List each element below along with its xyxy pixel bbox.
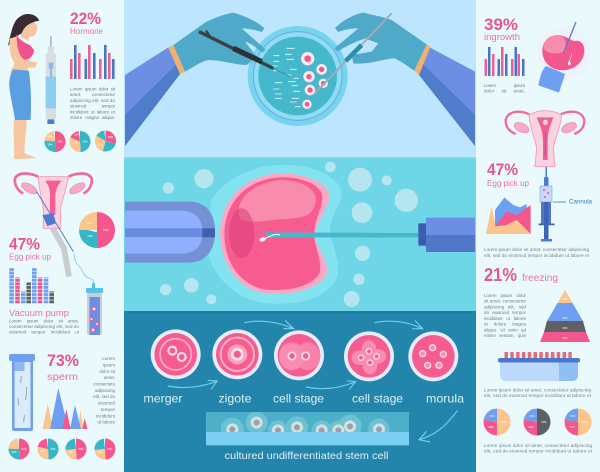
pie chart: egg pick up [87, 221, 109, 239]
stat: 47% egg pick up [487, 160, 530, 188]
stage labels: morula [426, 392, 464, 406]
panel: cell development stages [124, 313, 476, 472]
stage labels: cell stage [352, 392, 403, 406]
pie chart: egg pick up: 50% [103, 228, 109, 232]
text block: vacuum pump: eiusmod tempor incididunt ut [9, 330, 80, 334]
panel: right freezing section [484, 265, 593, 454]
text block: freezing: adipiscing elit, sed [484, 304, 526, 309]
text block: sperm: ut labore [97, 420, 115, 425]
stat: 21% freezing: 21% [484, 265, 517, 285]
pyramid chart [540, 290, 590, 342]
text block: sperm: incididunt [96, 413, 116, 418]
text block: sperm: Lorem [102, 356, 115, 361]
pie chart row: hormone: 30% [47, 142, 53, 146]
text block: sperm: elit, sed do [93, 394, 115, 399]
pie chart row: sperm: 50% [107, 447, 113, 451]
icon: syringe with cannula: Cannula [569, 198, 592, 206]
pie chart row: hormone: 20% [47, 134, 53, 138]
culture caption: cultured undifferentiated stem cell [224, 450, 388, 462]
bar chart: block columns [9, 268, 54, 304]
pyramid chart: 50% [562, 316, 568, 320]
stat: 22% hormone [70, 9, 104, 36]
text block: hormone: adipiscing elit, sed do [70, 98, 115, 103]
text block: freezing: et dolore magna [484, 322, 526, 327]
panel: left sperm section [9, 351, 116, 454]
left holding pipette [125, 202, 215, 263]
left gloved hand with syringe [125, 13, 290, 146]
text block: pies: Lorem ipsum dolor sit amet, consectetur adipiscing [484, 443, 592, 448]
text block: ingrowth: dolor sit amet, [484, 89, 525, 94]
pie chart row: hormone: 50% [57, 140, 63, 144]
panel: left hormone section [8, 9, 116, 159]
pie chart row: hormone: 20% [74, 132, 80, 136]
text block: freezing: minim veniam, quis [484, 333, 527, 338]
text block: sperm: amet, [104, 375, 115, 380]
text block: egg pick up: elit, sed do eiusmod tempor incididunt ut labore et [484, 253, 590, 258]
stat: 21% freezing [484, 265, 558, 285]
pie chart row: sperm: 50% [78, 447, 84, 451]
stat: 21% freezing: freezing [522, 273, 558, 284]
panel: sperm injection into egg [124, 159, 476, 313]
pie chart row: sperm: 50% [50, 447, 56, 451]
icon: egg with sperm and cup [538, 22, 591, 93]
injection needle and sperm [259, 232, 418, 242]
pie chart row: hormone: 50% [82, 140, 88, 144]
stat: 73% sperm [47, 351, 79, 383]
text block: hormone: dolore magna aliqua. [70, 115, 115, 120]
text block: freezing: sit amet, consectetur [484, 299, 526, 304]
culture dish with stem cells [206, 412, 409, 445]
arrows between stages [168, 320, 458, 442]
text block: freezing [484, 293, 527, 338]
icon: sperm tube [9, 354, 35, 431]
text block: hormone: incididunt ut labore et [70, 109, 116, 114]
stat: 47% egg pick up: Egg pick up [9, 252, 52, 262]
text block: freezing: aliqua. Ut enim ad [484, 327, 526, 332]
stat: 22% hormone: 22% [70, 9, 101, 28]
icon: freezing tray [498, 352, 580, 381]
text block: vacuum pump: consectetur adipiscing elit, sed do [9, 324, 79, 329]
pie chart row: freezing: 30% [528, 425, 534, 429]
stat: 39% ingrowth [484, 15, 520, 42]
stage: four-cell [344, 331, 394, 381]
icon: woman injecting [8, 14, 39, 159]
text block: sperm: eiusmod [98, 401, 115, 406]
stage labels: zigote [218, 392, 252, 406]
pie chart row: freezing: 50% [501, 420, 507, 424]
text block: vacuum pump: Lorem ipsum dolor sit amet, [9, 318, 79, 324]
text block: sperm: tempor [101, 407, 115, 412]
text block: hormone: amet, consectetur [70, 92, 116, 97]
stat: 39% ingrowth: 39% [484, 15, 518, 34]
right injector [418, 218, 475, 252]
pie chart: egg pick up: 25% [87, 234, 93, 238]
text block: sperm [93, 356, 116, 425]
peak chart [42, 388, 88, 429]
stat: 39% ingrowth: ingrowth [484, 32, 520, 42]
text block: egg pick up [484, 247, 590, 258]
text block: hormone [70, 86, 116, 120]
bar chart: ingrowth [484, 47, 524, 76]
pyramid chart: 50% [562, 336, 568, 340]
panel: left egg pick up section [9, 173, 109, 335]
icon: uterus with aspiration tool [15, 173, 94, 283]
pie chart row: hormone: 30% [98, 143, 104, 147]
text block: freezing: do eiusmod tempor [484, 310, 526, 315]
stat: 47% egg pick up: 47% [9, 234, 40, 254]
pie chart row: sperm [11, 444, 113, 454]
pie chart row: hormone [47, 132, 114, 147]
pie chart row: sperm: 30% [11, 450, 17, 454]
text block: sperm: ipsum [103, 362, 115, 367]
pyramid chart: 30% [562, 326, 568, 330]
text block: tray [484, 388, 592, 398]
pyramid chart: 10% [562, 297, 568, 301]
bar chart: hormone [70, 45, 115, 79]
icon: injection pen [46, 36, 56, 124]
text block: egg pick up: Lorem ipsum dolor sit amet, consectetur adipiscing [484, 247, 589, 252]
text block: hormone: eiusmod tempor [70, 104, 116, 109]
panel: hands and petri dish [124, 0, 476, 159]
text block: tray: elit, sed do eiusmod tempor incididunt ut labore et [484, 393, 592, 398]
text block: vacuum pump [9, 318, 80, 334]
text block: freezing: incididunt ut labore [484, 316, 526, 321]
pie chart row: freezing: 30% [488, 425, 494, 429]
panel: right ingrowth section [484, 15, 591, 167]
pie chart row: freezing [488, 414, 588, 429]
stage: morula [408, 331, 458, 381]
pie chart row: hormone: 30% [108, 135, 114, 139]
stage: two-cell [274, 330, 324, 380]
area chart [486, 197, 531, 234]
pie chart row: sperm: 25% [68, 450, 74, 454]
text block: ingrowth [484, 83, 525, 94]
stat: 47% egg pick up: Egg pick up [487, 179, 530, 188]
text block: sperm: adipiscing [95, 388, 115, 393]
egg cell [208, 165, 342, 304]
stage: zigote [212, 329, 262, 379]
panel: right egg pick up section [484, 160, 592, 258]
pie chart row: freezing: 50% [582, 420, 588, 424]
text block: sperm: dolor sit [99, 369, 116, 374]
stat: 73% sperm: sperm [47, 371, 78, 383]
pie chart row: freezing: 20% [570, 414, 576, 418]
pie chart row: freezing: 30% [569, 425, 575, 429]
text block: freezing: Lorem ipsum dolor [484, 293, 526, 298]
text block: ingrowth: Lorem ipsum [484, 83, 525, 88]
stage: merger [151, 329, 201, 379]
bubbles [160, 162, 418, 307]
icon: uterus [506, 111, 584, 167]
petri dish [248, 26, 348, 126]
stat: 47% egg pick up [9, 234, 52, 262]
stage labels: merger [144, 392, 182, 406]
pie chart: egg pick up: 25% [87, 221, 93, 225]
right gloved hand with tool [315, 13, 475, 146]
text block: sperm: consectetu [93, 382, 115, 386]
stat: 22% hormone: Hormone [70, 27, 104, 36]
pie chart row: sperm: 25% [97, 450, 103, 454]
text block: pies: elit, sed do eiusmod tempor incididunt ut labore et [484, 448, 593, 454]
pie chart row: sperm: 50% [21, 447, 27, 451]
pie chart row: freezing: 20% [529, 414, 535, 418]
pie chart row: freezing: 50% [541, 420, 547, 424]
stage labels: cell stage [273, 392, 324, 406]
stat: 73% sperm: 73% [47, 351, 79, 370]
text block: hormone: Lorem ipsum dolor sit [70, 86, 116, 92]
pie chart row: freezing: 20% [489, 414, 495, 418]
text block: pies [484, 443, 593, 454]
stage labels [144, 392, 464, 406]
pie chart row: sperm: 30% [40, 449, 46, 453]
text block: tray: Lorem ipsum dolor sit amet, consectetur adipiscing [484, 388, 591, 392]
heading: vacuum pump: Vacuum pump [9, 308, 69, 318]
pie chart row: hormone: 30% [72, 140, 78, 144]
icon: collection vial [86, 283, 103, 335]
stat: 47% egg pick up: 47% [487, 160, 518, 179]
